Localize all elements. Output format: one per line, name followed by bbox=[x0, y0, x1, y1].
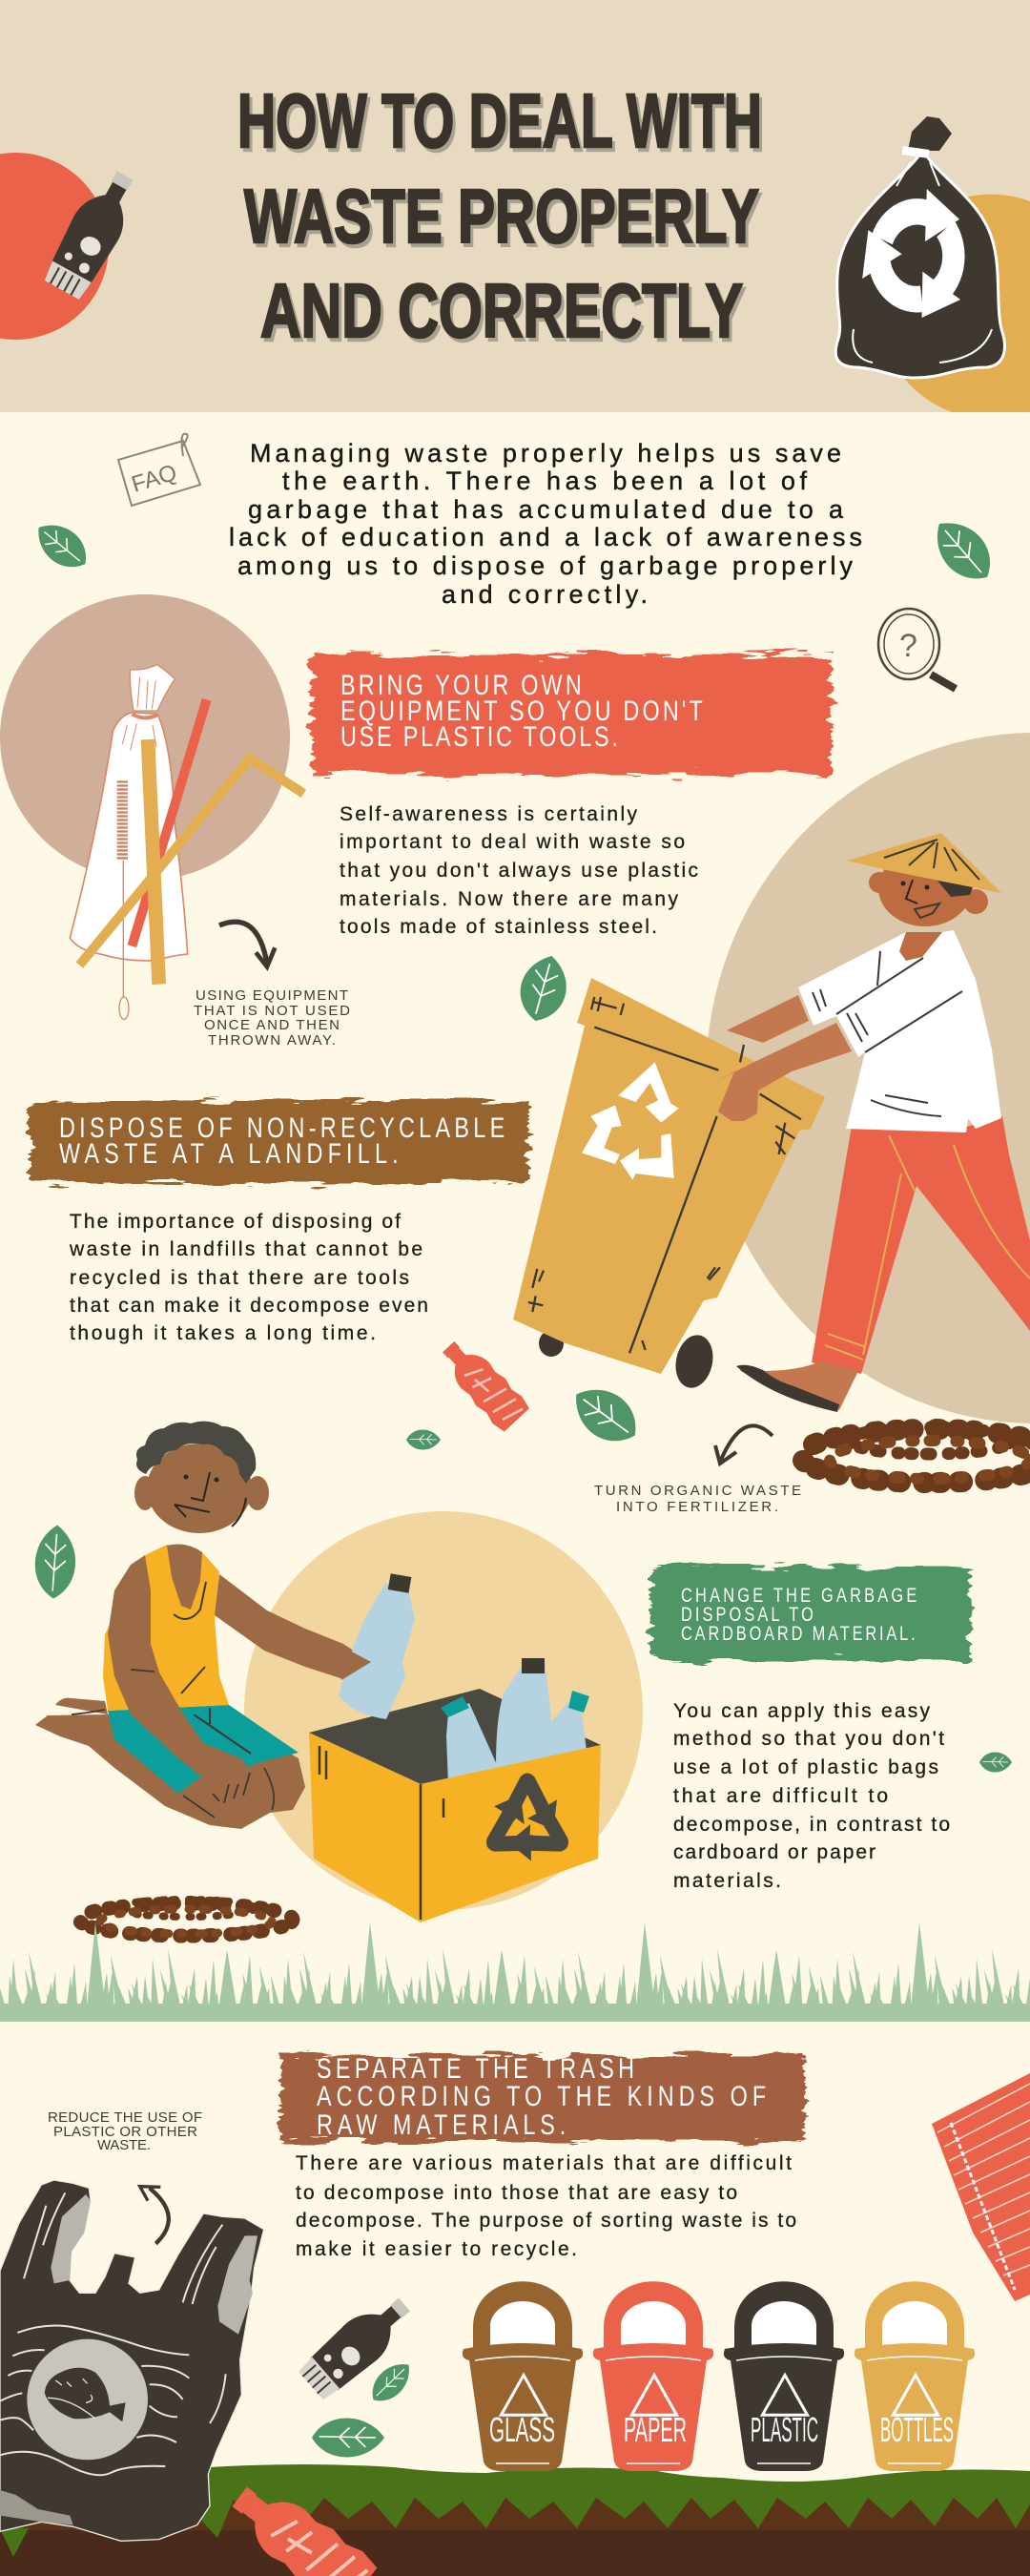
panel: change garbage disposal heading bbox=[650, 1567, 971, 1660]
icon: dark bottle lower bbox=[296, 2286, 420, 2404]
caption: organic waste: TURN ORGANIC WASTE bbox=[594, 1483, 801, 1499]
icon: small right leaf bbox=[979, 1752, 1012, 1773]
illustration: boy with bottle bbox=[35, 1422, 371, 1829]
bin body bbox=[513, 978, 825, 1374]
bin: plastic: PLASTIC bbox=[751, 2410, 818, 2449]
title: AND CORRECTLY bbox=[260, 268, 743, 353]
bin: glass bbox=[463, 2281, 583, 2471]
bin: bottles bbox=[855, 2281, 975, 2471]
text: apply this easy method: method so that you don't bbox=[673, 1728, 944, 1750]
straw hat bbox=[847, 833, 1001, 893]
text: self-awareness: that you don't always use plastic bbox=[340, 860, 698, 882]
compost pile left bbox=[79, 1900, 293, 1936]
text: self-awareness: materials. Now there are many bbox=[340, 888, 679, 910]
icon: green leaf by bin bbox=[513, 950, 574, 1027]
intro text bbox=[229, 439, 862, 609]
text: importance of landfills: waste in landfills that cannot be bbox=[69, 1238, 422, 1260]
box interior bbox=[309, 1689, 601, 1784]
ears bbox=[869, 872, 988, 914]
head bbox=[878, 850, 972, 926]
arrow: points to caption bbox=[219, 922, 275, 966]
text: self-awareness: Self-awareness is certainly bbox=[340, 803, 637, 825]
cloth bag, straws, brush bbox=[70, 665, 303, 1019]
caption: using equipment: ONCE AND THEN bbox=[204, 1017, 340, 1033]
illustration: cardboard box with bottles bbox=[309, 1573, 601, 1922]
icon: small leaf bbox=[406, 1429, 441, 1450]
back leg bbox=[917, 1116, 1030, 1331]
text: apply this easy method: materials. bbox=[673, 1870, 781, 1892]
text: various materials: There are various materials that are difficult bbox=[296, 2152, 792, 2174]
intro text: lack of education and a lack of awareness bbox=[229, 523, 862, 551]
panel: change garbage disposal heading: CARDBOARD MATERIAL. bbox=[681, 1622, 916, 1644]
front leg bbox=[812, 1126, 954, 1374]
panel: change garbage disposal heading: CHANGE THE GARBAGE bbox=[681, 1584, 917, 1606]
text: apply this easy method: decompose, in contrast to bbox=[673, 1814, 950, 1836]
text: apply this easy method: use a lot of plastic bags bbox=[673, 1756, 938, 1778]
icon: right leaf bbox=[923, 509, 1003, 592]
title: WASTE PROPERLY bbox=[244, 174, 759, 259]
text: self-awareness: tools made of stainless steel. bbox=[340, 916, 657, 938]
panel: bring your own equipment heading: USE PLASTIC TOOLS. bbox=[340, 720, 618, 753]
caption: organic waste bbox=[594, 1483, 801, 1515]
foot and sandal bbox=[739, 1361, 858, 1410]
header band bbox=[0, 0, 1030, 412]
panel: separate the trash heading: RAW MATERIALS. bbox=[317, 2109, 566, 2141]
decor: red circle bbox=[0, 153, 109, 340]
hair bbox=[136, 1422, 256, 1484]
ears bbox=[134, 1476, 269, 1510]
bottles in box bbox=[446, 1665, 587, 1784]
icon: red plastic bottle bbox=[434, 1333, 531, 1434]
text: apply this easy method: You can apply this easy bbox=[673, 1700, 931, 1722]
icon: lower leaf two bbox=[312, 2419, 384, 2457]
bin markings and recycle symbol bbox=[528, 997, 801, 1353]
face bbox=[147, 1444, 252, 1533]
icon: dark glass bottle bbox=[40, 163, 147, 302]
icon: left leaf bbox=[28, 514, 96, 577]
torn red plastic bbox=[932, 2073, 1030, 2301]
near arm and hand bbox=[108, 1555, 256, 1806]
illustration: man pushing recycling bin bbox=[513, 833, 1030, 1412]
pale yellow circle bbox=[244, 1511, 643, 1910]
icon: dark plastic bag with whale bbox=[0, 2180, 264, 2541]
neck bbox=[899, 932, 942, 961]
wheels bbox=[539, 1330, 564, 1357]
intro text: garbage that has accumulated due to a bbox=[248, 495, 844, 524]
intro text: the earth. There has been a lot of bbox=[282, 467, 807, 495]
tan backdrop circle bbox=[706, 733, 1030, 1423]
panel: dispose at landfill heading: DISPOSE OF NON-RECYCLABLE bbox=[59, 1111, 505, 1144]
text: importance of landfills: recycled is that there are tools bbox=[70, 1267, 409, 1289]
intro text: Managing waste properly helps us save bbox=[250, 439, 841, 467]
caption: reduce plastic: WASTE. bbox=[97, 2137, 151, 2153]
caption: using equipment: USING EQUIPMENT bbox=[196, 987, 348, 1004]
panel: separate the trash heading: SEPARATE THE TRASH bbox=[317, 2052, 634, 2085]
icon: red bottle in soil bbox=[221, 2472, 380, 2576]
icon: FAQ note: FAQ bbox=[129, 460, 180, 498]
tan circle bbox=[0, 594, 290, 881]
text: self-awareness bbox=[340, 803, 698, 938]
intro text: among us to dispose of garbage properly bbox=[237, 551, 853, 580]
panel: bring your own equipment heading bbox=[311, 654, 832, 775]
caption: organic waste: INTO FERTILIZER. bbox=[616, 1499, 778, 1515]
text: importance of landfills: The importance of disposing of bbox=[70, 1211, 401, 1233]
chest bbox=[167, 1545, 202, 1610]
caption: using equipment bbox=[194, 987, 350, 1049]
text: various materials bbox=[296, 2152, 796, 2260]
recycle symbol on box bbox=[473, 1774, 581, 1874]
back arm bbox=[727, 995, 809, 1043]
icon: leaf near bottle bbox=[564, 1376, 648, 1454]
bin: glass: GLASS bbox=[489, 2410, 555, 2449]
arrow: to fertilizer caption bbox=[715, 1425, 772, 1464]
section 1 illustration: cloth bag and straws bbox=[0, 594, 303, 1019]
icon: left green leaf bbox=[33, 1524, 77, 1600]
text: various materials: to decompose into those that are easy to bbox=[296, 2182, 737, 2204]
text: importance of landfills: that can make it decompose even bbox=[70, 1295, 428, 1317]
ground with grass and soil bbox=[0, 2464, 1030, 2576]
text: apply this easy method: that are difficult to bbox=[673, 1785, 888, 1807]
arrow: upward from bag bbox=[140, 2187, 169, 2244]
bin: paper: PAPER bbox=[624, 2410, 687, 2449]
icon: lower leaf one bbox=[364, 2356, 418, 2409]
panel: dispose at landfill heading: WASTE AT A LANDFILL. bbox=[59, 1137, 399, 1170]
caption: using equipment: THROWN AWAY. bbox=[208, 1032, 336, 1049]
icon: FAQ note bbox=[118, 434, 200, 506]
far arm bbox=[215, 1574, 371, 1679]
title bbox=[237, 78, 762, 353]
box front right bbox=[421, 1745, 601, 1922]
panel: bring your own equipment heading: BRING YOUR OWN bbox=[340, 669, 582, 701]
near arm and hand bbox=[717, 1023, 852, 1121]
panel: dispose at landfill heading bbox=[31, 1101, 528, 1183]
text: apply this easy method: cardboard or paper bbox=[673, 1841, 876, 1863]
decor: yellow circle bbox=[878, 195, 1030, 412]
box front left bbox=[309, 1733, 421, 1922]
text: various materials: make it easier to recycle. bbox=[296, 2238, 577, 2260]
panel: separate the trash heading: ACCORDING TO THE KINDS OF bbox=[317, 2080, 766, 2112]
caption: reduce plastic bbox=[48, 2109, 202, 2153]
icon: garbage bag with recycle symbol bbox=[835, 116, 1004, 378]
panel: separate the trash heading bbox=[280, 2052, 805, 2141]
text: importance of landfills: though it takes a long time. bbox=[70, 1322, 376, 1344]
intro text: and correctly. bbox=[442, 580, 648, 609]
icon: magnifier with question mark bbox=[878, 609, 956, 689]
grass strip bbox=[0, 1922, 1030, 2022]
compost pile right bbox=[801, 1427, 1030, 1483]
caption: reduce plastic: REDUCE THE USE OF bbox=[48, 2109, 202, 2126]
title: HOW TO DEAL WITH bbox=[237, 78, 762, 163]
icon: magnifier with question mark: ? bbox=[899, 628, 917, 664]
text: importance of landfills bbox=[69, 1211, 428, 1344]
bin: paper bbox=[593, 2281, 713, 2471]
tank top bbox=[103, 1545, 229, 1711]
bin: plastic bbox=[724, 2281, 844, 2471]
shorts bbox=[108, 1705, 299, 1794]
panel: change garbage disposal heading: DISPOSAL TO bbox=[681, 1603, 814, 1625]
caption: using equipment: THAT IS NOT USED bbox=[194, 1003, 350, 1019]
text: apply this easy method bbox=[673, 1700, 950, 1892]
text: various materials: decompose. The purpose of sorting waste is to bbox=[296, 2210, 796, 2232]
panel: bring your own equipment heading: EQUIPMENT SO YOU DON'T bbox=[340, 695, 703, 727]
caption: reduce plastic: PLASTIC OR OTHER bbox=[53, 2124, 197, 2140]
text: self-awareness: important to deal with waste so bbox=[340, 831, 685, 853]
held bottle bbox=[339, 1584, 415, 1719]
shirt bbox=[798, 930, 1001, 1132]
legs bbox=[35, 1698, 305, 1829]
